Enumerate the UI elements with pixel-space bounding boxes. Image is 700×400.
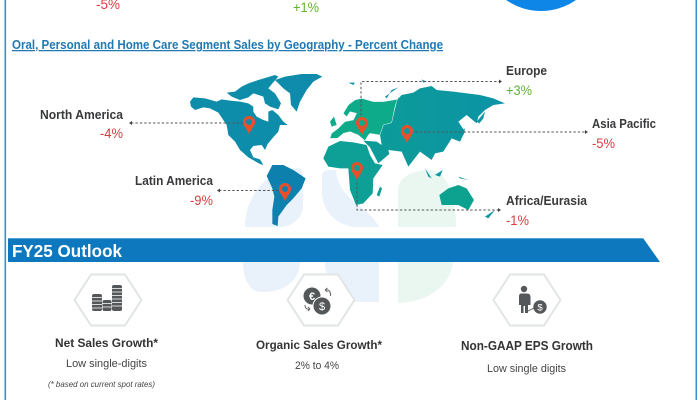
blue circle fragment	[480, 0, 602, 11]
label: North America: North America	[40, 108, 124, 122]
label: Africa/Eurasia: Africa/Eurasia	[506, 194, 588, 208]
pin: Africa	[351, 162, 363, 180]
pin: Europe	[356, 117, 368, 135]
connector: Europe	[361, 82, 500, 120]
icon: currency exchange	[288, 274, 354, 326]
top values	[96, 0, 319, 15]
pin: North America	[243, 116, 255, 134]
FY25 Outlook banner: FY25 Outlook	[12, 241, 122, 261]
icon: currency exchange: €	[309, 291, 315, 303]
outlook: Non-GAAP EPS Growth: Low single digits	[487, 363, 566, 375]
label: Europe: Europe	[506, 64, 547, 78]
label: Asia Pacific: -5%	[592, 135, 615, 151]
label: Europe: +3%	[506, 82, 532, 98]
label: North America: -4%	[100, 125, 123, 141]
map pins	[243, 116, 413, 201]
connector: North America	[131, 122, 245, 124]
icon: coin stacks	[74, 274, 142, 326]
pin: Latin America	[279, 183, 291, 201]
icon: currency exchange: $	[319, 301, 325, 313]
outlook: Net Sales Growth: Net Sales Growth*	[55, 336, 158, 350]
label: North America	[40, 108, 124, 141]
label: Europe	[506, 64, 547, 98]
label: Africa/Eurasia: -1%	[506, 212, 529, 228]
outlook: Organic Sales Growth: Organic Sales Growth*	[256, 338, 382, 352]
world map	[190, 74, 505, 226]
outlook: Organic Sales Growth	[256, 274, 382, 372]
outlook: Non-GAAP EPS Growth: Non-GAAP EPS Growth	[461, 339, 593, 353]
outlook: Net Sales Growth: (* based on current spot rates)	[48, 379, 155, 389]
label: Africa/Eurasia	[506, 194, 588, 228]
label: Latin America: -9%	[190, 192, 213, 208]
connector: Africa/Eurasia	[357, 178, 499, 210]
icon: person with coin: $	[537, 302, 543, 314]
map: Eurasia	[330, 79, 505, 167]
FY25 Outlook banner	[8, 238, 660, 262]
section heading: Oral, Personal and Home Care Segment Sales by Geography - Percent Change	[12, 38, 443, 52]
connector: Latin America	[219, 190, 280, 192]
label: Latin America	[135, 174, 214, 208]
pin: Asia Pacific	[401, 125, 413, 143]
connector arrowheads	[129, 80, 588, 212]
outlook: Net Sales Growth	[48, 274, 158, 389]
label: Latin America: Latin America	[135, 174, 214, 188]
label: Asia Pacific: Asia Pacific	[592, 117, 656, 131]
connector: Asia Pacific	[415, 131, 586, 133]
outlook: Net Sales Growth: Low single-digits	[66, 358, 147, 370]
label: Asia Pacific	[592, 117, 656, 151]
outlook: Organic Sales Growth: 2% to 4%	[295, 360, 339, 372]
outlook: Non-GAAP EPS Growth	[461, 274, 593, 375]
map: Africa and Oceania	[323, 141, 495, 218]
background logo shapes	[243, 168, 456, 303]
map: Americas and Greenland	[190, 74, 322, 226]
